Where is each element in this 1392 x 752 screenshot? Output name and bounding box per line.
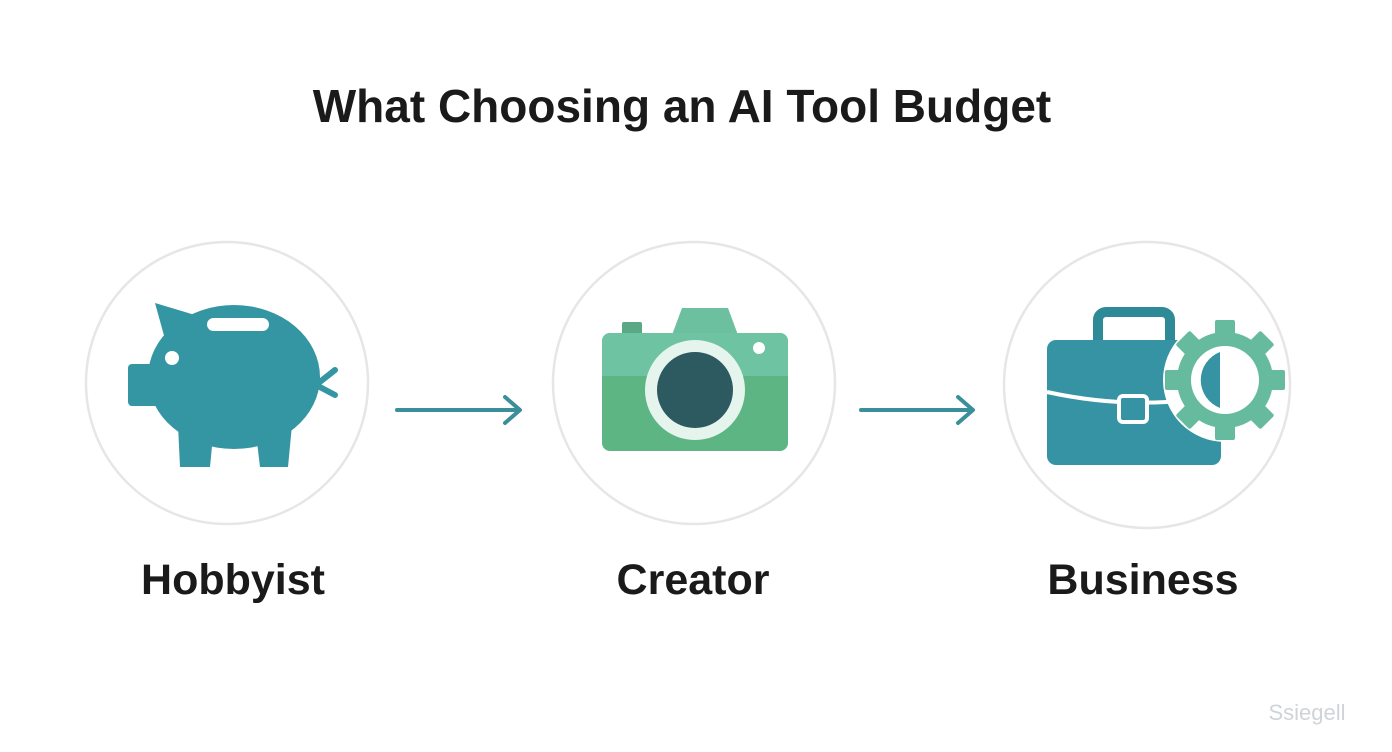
title: What Choosing an AI Tool Budget — [313, 80, 1051, 132]
panel: creator — [553, 242, 835, 604]
arrow 1 — [397, 397, 520, 423]
watermark: Ssiegell — [1268, 700, 1346, 725]
icon: camera — [602, 308, 788, 451]
icon: briefcase with gear — [1047, 312, 1287, 465]
label: business: Business — [1047, 556, 1239, 604]
label: creator: Creator — [617, 556, 770, 604]
icon: piggy bank — [128, 303, 335, 467]
arrow 2 — [861, 397, 973, 423]
panel: business — [1004, 242, 1290, 604]
panel: hobbyist — [86, 242, 368, 604]
label: hobbyist: Hobbyist — [141, 556, 325, 604]
